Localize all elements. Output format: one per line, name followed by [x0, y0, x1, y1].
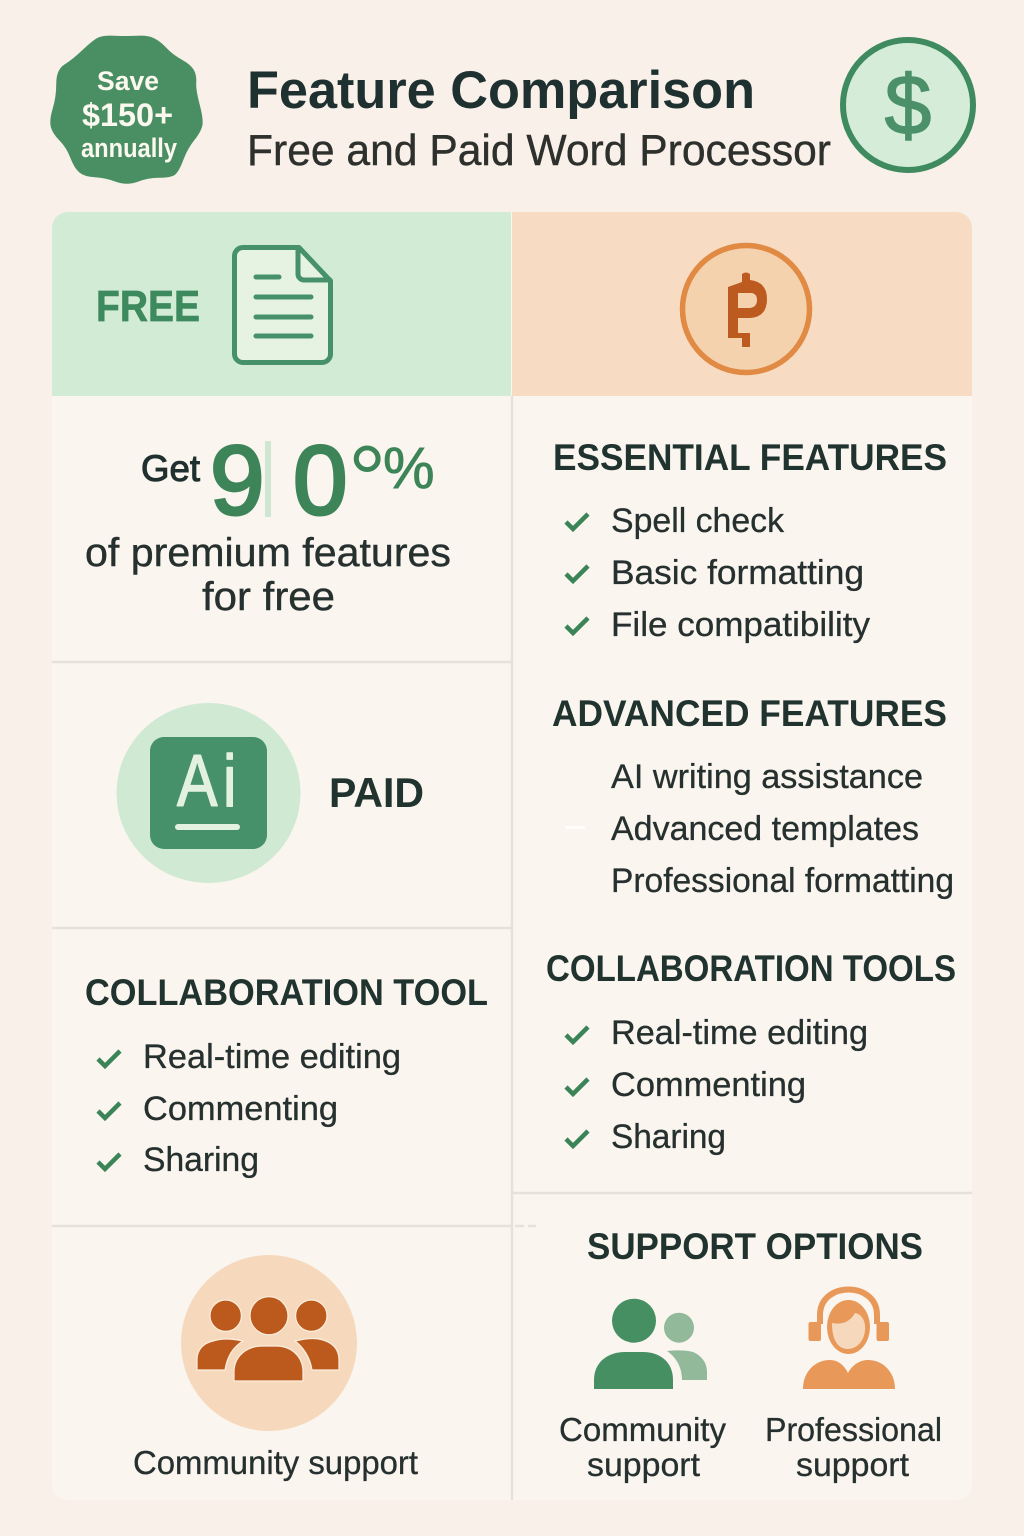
- list: collaboration tools paid: Commenting: [611, 1066, 806, 1104]
- icon: dollar coin: $: [885, 58, 931, 152]
- list: essential features: ESSENTIAL FEATURES: [553, 437, 947, 478]
- badge: save annually: Save: [97, 66, 159, 96]
- icon: AI: A: [177, 741, 218, 822]
- icon: community support: [594, 1299, 707, 1389]
- title: Free and Paid Word Processor: [247, 126, 831, 175]
- list: collaboration tools paid: COLLABORATION TOOLS: [546, 948, 956, 989]
- title: Feature Comparison: [247, 61, 755, 120]
- stat: 90 percent: 0: [293, 425, 348, 535]
- icon: ruble coin: [682, 246, 810, 372]
- badge: save annually: annually: [81, 133, 177, 163]
- label: professional support option: Professional: [765, 1411, 942, 1448]
- list: collaboration tool free: Commenting: [143, 1090, 338, 1128]
- list: collaboration tools paid: Sharing: [611, 1118, 726, 1156]
- list: essential features: Basic formatting: [611, 554, 864, 592]
- list: advanced features: [552, 693, 954, 900]
- label: community support option: [559, 1411, 726, 1483]
- panel: comparison table: [52, 212, 972, 1500]
- list: essential features: [553, 437, 947, 644]
- list: advanced features: ADVANCED FEATURES: [552, 693, 947, 734]
- list: collaboration tools paid: Real-time editing: [611, 1014, 868, 1052]
- list: advanced features: AI writing assistance: [611, 758, 923, 796]
- label: free: FREE: [96, 282, 200, 331]
- label: professional support option: [765, 1411, 942, 1483]
- stat: 90 percent: of premium features: [85, 531, 451, 575]
- icon: community group: [181, 1255, 357, 1431]
- heading: support options: SUPPORT OPTIONS: [587, 1226, 923, 1267]
- label: community support option: Community: [559, 1411, 726, 1448]
- icon: professional support: [803, 1290, 895, 1389]
- stat: 90 percent: for free: [202, 575, 335, 619]
- list: collaboration tool free: [85, 972, 488, 1179]
- list: collaboration tool free: Real-time editing: [143, 1038, 401, 1076]
- badge: save annually: [51, 36, 202, 183]
- list: essential features: File compatibility: [611, 606, 870, 644]
- stat: 90 percent: Get: [141, 448, 201, 489]
- label: community support option: support: [587, 1446, 700, 1483]
- list: collaboration tool free: Sharing: [143, 1141, 259, 1179]
- list: advanced features: Professional formatting: [611, 862, 954, 900]
- list: collaboration tools paid: [546, 948, 956, 1156]
- icon: AI: i: [223, 741, 236, 822]
- icon: AI: [116, 703, 300, 883]
- icon: document: [234, 248, 330, 362]
- stat: 90 percent: [85, 425, 451, 619]
- icon: dollar coin: [843, 40, 973, 170]
- list: collaboration tool free: COLLABORATION TOOL: [85, 972, 488, 1013]
- stat: 90 percent: °: [348, 426, 386, 533]
- label: paid: PAID: [329, 769, 424, 816]
- stat: 90 percent: 9: [210, 425, 265, 535]
- list: essential features: Spell check: [611, 502, 785, 540]
- badge: save annually: $150+: [82, 97, 173, 133]
- stat: 90 percent: %: [383, 436, 435, 501]
- label: community support: Community support: [133, 1444, 418, 1481]
- list: advanced features: Advanced templates: [611, 810, 919, 848]
- label: professional support option: support: [796, 1446, 909, 1483]
- title: [247, 61, 831, 175]
